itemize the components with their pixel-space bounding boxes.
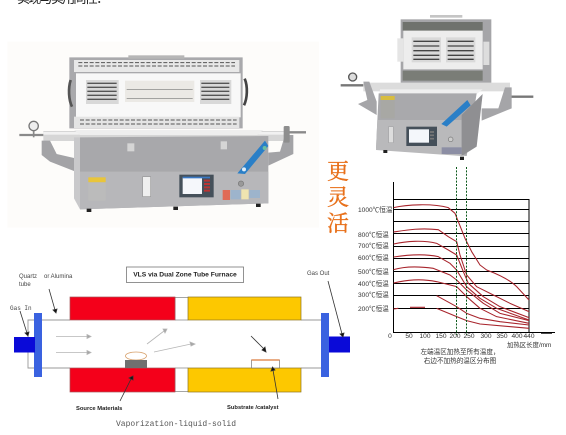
right flange — [321, 313, 329, 377]
feet — [87, 209, 91, 212]
y axis labels — [358, 205, 393, 313]
tube — [43, 131, 287, 141]
y axis labels: 400℃恒温 — [358, 279, 389, 288]
chart: temperature distribution curves — [358, 167, 555, 365]
label: gas in: Gas In — [10, 305, 32, 312]
x axis labels: 100 — [419, 333, 431, 340]
furnace body — [74, 130, 263, 135]
chart notes: 左端温区加热至所有温度， — [420, 347, 500, 356]
x axis labels: 0 — [388, 333, 392, 340]
substrate — [252, 360, 280, 368]
schematic: VLS dual zone furnace — [10, 267, 350, 429]
label: substrate: Substrate /catalyst — [227, 405, 279, 411]
lid — [69, 57, 243, 128]
right gas block — [329, 336, 350, 352]
touch screen — [179, 175, 214, 197]
tube outline — [28, 320, 321, 368]
pressure gauge — [29, 121, 38, 131]
knob — [448, 137, 453, 142]
label: quartz tube — [19, 274, 73, 288]
right side labels — [223, 190, 230, 200]
green dashed markers — [456, 167, 466, 335]
x axis labels: 200 — [449, 333, 461, 340]
vertical orange heading: 活 — [327, 207, 349, 238]
photo: small single zone tube furnace — [341, 15, 533, 160]
caption: Vaporization-liquid-solid — [116, 420, 236, 429]
blue diagonal label — [237, 141, 268, 174]
chart notes — [420, 347, 500, 365]
y axis labels: 1000℃恒温 — [358, 205, 393, 214]
label: quartz tube: or Alumina — [44, 274, 73, 280]
furnace body — [379, 89, 483, 94]
title box: VLS via Dual Zone Tube Furnace — [133, 272, 237, 278]
y axis labels: 600℃恒温 — [358, 253, 389, 262]
left flange — [34, 313, 42, 377]
x axis labels: 250 — [463, 333, 475, 340]
touch screen — [406, 127, 437, 146]
y axis labels: 500℃恒温 — [358, 267, 389, 276]
source material — [125, 352, 147, 368]
grid lines and axes — [394, 182, 555, 333]
y axis labels: 700℃恒温 — [358, 241, 389, 250]
label: source materials: Source Materials — [76, 406, 122, 412]
temperature curves — [394, 205, 529, 328]
flow meter — [389, 127, 393, 143]
x axis title: 加热区长度/mm — [507, 340, 551, 349]
y axis labels: 800℃恒温 — [358, 230, 389, 239]
pressure gauge — [349, 73, 357, 81]
x axis labels: 440 — [523, 333, 535, 340]
lid — [401, 19, 491, 83]
vertical orange heading — [327, 155, 349, 238]
blue diagonal label — [441, 100, 471, 127]
label: quartz tube: tube — [19, 282, 31, 288]
feet — [383, 150, 387, 153]
tube — [363, 83, 510, 91]
yellow heating zone — [188, 297, 301, 392]
knob — [238, 181, 244, 186]
title box — [126, 267, 244, 282]
vertical orange heading: 更 — [327, 155, 349, 186]
red heating zone — [70, 297, 175, 392]
chart notes: 右边不加热的温区分布图 — [424, 356, 497, 365]
photo: large dual zone tube furnace — [7, 42, 319, 228]
vertical orange heading: 灵 — [327, 181, 349, 212]
label: gas out: Gas Out — [307, 271, 330, 277]
x axis labels — [388, 333, 535, 340]
white gap between zones — [175, 298, 188, 392]
flow meter — [143, 177, 151, 197]
x axis labels: 50 — [405, 333, 413, 340]
x axis labels: 400 — [511, 333, 523, 340]
flow arrows — [56, 329, 195, 354]
warning label — [88, 177, 106, 182]
y axis labels: 300℃恒温 — [358, 290, 389, 299]
left gas block — [14, 337, 35, 352]
y axis labels: 200℃恒温 — [358, 304, 389, 313]
x axis labels: 300 — [480, 333, 492, 340]
label: quartz tube: Quartz — [19, 274, 37, 280]
right side labels — [442, 147, 462, 154]
support arms — [42, 141, 80, 173]
black leader arrows — [20, 281, 344, 401]
x axis labels: 350 — [496, 333, 508, 340]
warning label — [381, 96, 395, 100]
x axis labels: 150 — [435, 333, 447, 340]
support arms — [358, 82, 377, 115]
